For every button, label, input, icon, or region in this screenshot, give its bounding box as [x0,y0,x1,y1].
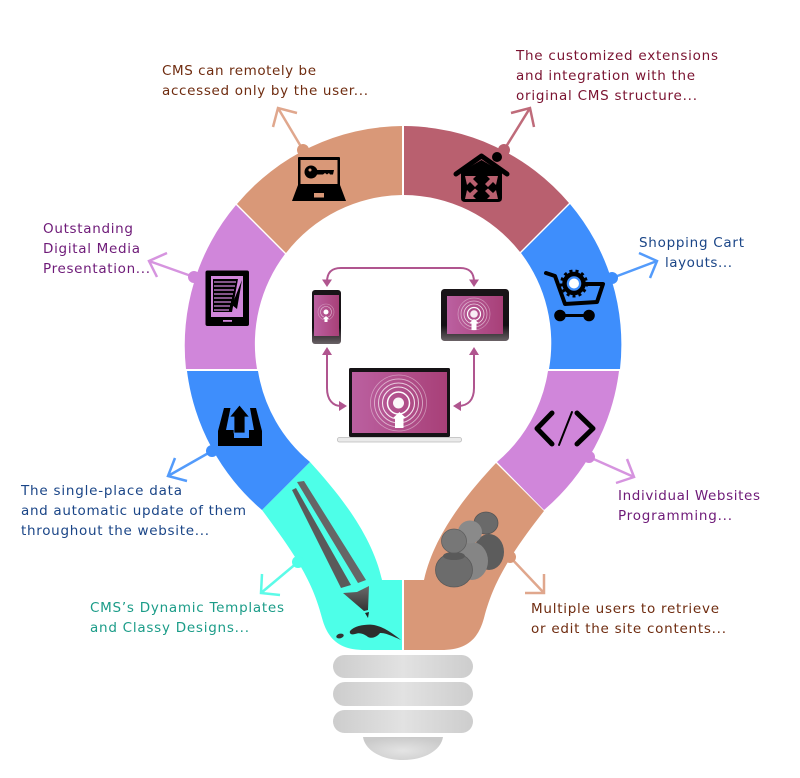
arrow: shopping cart [606,253,657,284]
text: programming: Programming... [618,508,732,524]
icon: cart with gear [546,271,603,321]
text: data update: The single-place data [20,483,182,499]
bulb segment: remote access (orange) [237,126,402,253]
arrow: templates [261,556,304,595]
text: data update: and automatic update of them [21,503,246,519]
text: shopping cart: Shopping Cart [639,235,744,251]
connector: tablet to laptop [453,347,479,411]
text: shopping cart: layouts... [665,255,732,271]
bulb segment: multiple users (orange) [404,463,544,650]
arrow: remote access [273,108,309,156]
bulb segment: digital media (purple) [185,205,285,369]
text: digital media: Digital Media [43,241,140,257]
bulb segment: templates (cyan) [262,462,402,650]
text: data update [20,483,246,539]
icon: laptop with key [292,157,346,201]
device: tablet [441,289,509,341]
icon: inbox upload [218,405,262,446]
text: extensions [515,48,718,104]
text: digital media [43,221,150,277]
arrow: programming [583,451,634,483]
text: digital media: Presentation... [43,261,150,277]
icon: code brackets [537,412,593,445]
icon: pen with ink [292,481,401,640]
text: extensions: original CMS structure... [516,88,697,104]
text: multiple users: Multiple users to retrieve [531,601,719,617]
text: remote access: accessed only by the user... [162,83,368,99]
connector: phone to tablet [322,268,479,287]
text: extensions: and integration with the [516,68,695,84]
text: programming [618,488,760,524]
icon: users group [436,512,504,587]
arrow: extensions [498,108,534,156]
text: multiple users: or edit the site contents... [531,621,726,637]
arrow: digital media [149,253,200,283]
connector: phone to laptop [322,347,347,411]
bulb segment: data update (blue) [187,371,310,510]
text: remote access: CMS can remotely be [162,63,316,79]
text: templates: and Classy Designs... [90,620,249,636]
bulb segment: programming (purple) [497,371,619,510]
bulb segment: shopping cart (blue) [521,204,621,369]
bulb segment: extensions (maroon) [404,126,569,252]
text: templates: CMS’s Dynamic Templates [90,600,284,616]
text: programming: Individual Websites [618,488,760,504]
text: shopping cart [639,235,744,271]
text: data update: throughout the website... [21,523,209,539]
bulb base [333,655,473,760]
device: laptop [338,368,462,442]
arrow: data update [168,445,218,481]
text: remote access [162,63,368,99]
arrow: multiple users [504,551,544,593]
text: multiple users [531,601,726,637]
text: extensions: The customized extensions [515,48,718,64]
icon: house with arrows [456,152,507,202]
device: phone [312,290,341,344]
text: digital media: Outstanding [43,221,133,237]
icon: e-book reader [206,270,249,326]
text: templates [90,600,284,636]
